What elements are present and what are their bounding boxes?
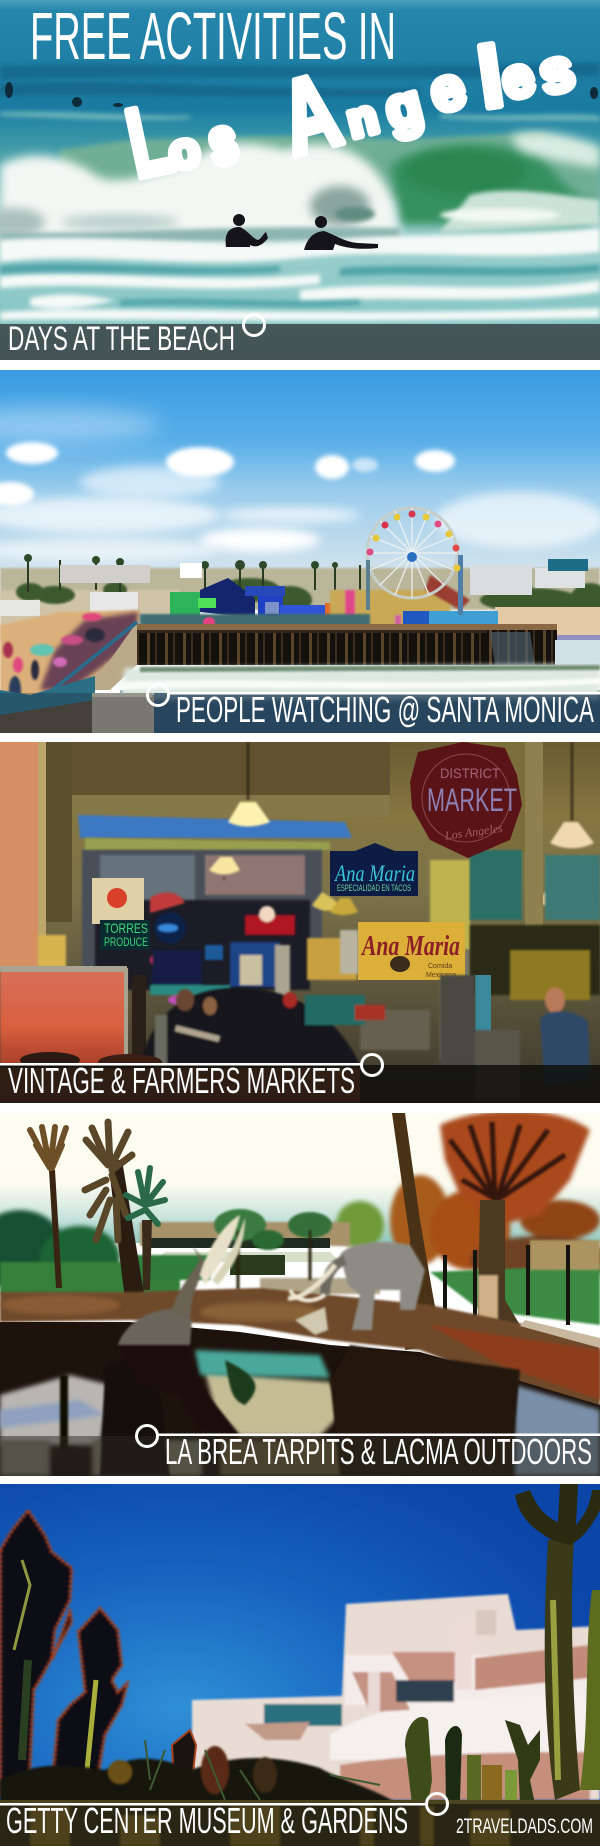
caption band: [0, 324, 600, 360]
caption band: [0, 1436, 600, 1476]
ground: [0, 1288, 600, 1410]
red board: [0, 968, 127, 1065]
right pillars: [430, 860, 470, 950]
panel: getty center: [0, 1484, 600, 1846]
caption: days at the beach: DAYS AT THE BEACH: [8, 320, 235, 358]
panel: vintage and farmers markets: [0, 742, 600, 1103]
roller coaster: [329, 574, 471, 624]
blue beam: [78, 815, 352, 838]
sign: torres produce: [92, 878, 150, 950]
sign: yellow ana maria: Mexicana: [426, 972, 456, 979]
title script: Los Angeles: e: [423, 53, 472, 126]
marker ring: [136, 1426, 158, 1446]
palm tops: [27, 560, 361, 592]
sign: yellow ana maria: Ana Maria: [360, 931, 460, 962]
pier and pilings: [137, 630, 557, 665]
bottom planting under band: [0, 1800, 600, 1846]
sign: district market: MARKET: [427, 782, 517, 818]
mammoth: standing: [288, 1242, 425, 1335]
title script: Los Angeles: A: [269, 51, 352, 178]
pond: [0, 1322, 600, 1476]
divider line: [0, 1803, 427, 1806]
marker ring: [244, 314, 264, 336]
title script: Los Angeles: s: [202, 105, 243, 178]
sign: ana maria neon: [330, 843, 418, 896]
title script: Los Angeles: o: [164, 120, 204, 181]
divider line: [168, 692, 600, 694]
panel: days at the beach: [0, 0, 600, 360]
right cactus: [515, 1484, 600, 1800]
photo: grand central market: [0, 742, 600, 1103]
caption: vintage and farmers markets: VINTAGE & FARMERS MARKETS: [8, 1060, 355, 1101]
panel: la brea tarpits: [0, 1111, 600, 1483]
caption band: [0, 1804, 600, 1846]
divider line: [158, 1434, 600, 1436]
photo: ocean wave: [0, 0, 600, 360]
amusement park: [200, 578, 255, 618]
sign: ana maria neon: Ana Maria: [333, 861, 415, 886]
tree line: [0, 1175, 600, 1290]
ferris wheel: [366, 508, 463, 615]
wave barrel: [390, 145, 600, 225]
walkway bridge: [95, 624, 137, 690]
marker ring: [426, 1794, 448, 1814]
title script: Los Angeles: s: [532, 35, 581, 108]
swimmers: [226, 214, 378, 250]
sign: torres produce: TORRES: [104, 920, 148, 936]
right palm: [392, 1111, 600, 1350]
photo: mammoths at tar pits: [0, 1111, 600, 1483]
title script: Los Angeles: l: [472, 29, 509, 127]
panel: people watching at santa monica: [0, 370, 600, 733]
left column: [0, 742, 38, 967]
sign: yellow ana maria: Comida: [428, 963, 452, 970]
surf: [120, 690, 600, 733]
low agave planting: [0, 1746, 400, 1808]
palm trees centre: [214, 1209, 332, 1290]
caption band: [154, 693, 600, 733]
neon cluster: [150, 906, 295, 1005]
sign: district market: DISTRICT: [440, 765, 500, 781]
railings and lower deck: [0, 676, 95, 715]
title script: Los Angeles: g: [378, 71, 429, 143]
marker ring: [362, 1054, 382, 1076]
caption band: [0, 1065, 600, 1103]
building: [192, 1594, 600, 1800]
buildings: [0, 559, 588, 616]
title script: Los Angeles: [117, 29, 581, 198]
left cacti: [0, 1510, 128, 1800]
tall palms left: [30, 1122, 165, 1300]
photo: getty center and cacti: [0, 1484, 600, 1846]
man in plaid: [540, 987, 590, 1085]
title script: Los Angeles: L: [117, 82, 181, 198]
sign: district market: [410, 742, 522, 858]
shore and hills: [0, 568, 600, 610]
marker ring: [148, 684, 168, 706]
crowd on the walkway: [0, 608, 140, 695]
foam: [0, 144, 400, 240]
surfers far: [5, 82, 598, 107]
title script: Los Angeles: e: [495, 43, 540, 112]
sand right: [495, 607, 600, 637]
pendant lamps: [209, 742, 594, 915]
crowd and counter: [142, 974, 520, 1065]
sign: yellow ana maria: [358, 922, 465, 980]
sign: ana maria neon: ESPECIALIDAD EN TACOS: [337, 883, 411, 893]
museum building: [140, 1222, 350, 1246]
photo: santa monica pier: [0, 370, 600, 733]
lawn: [0, 1262, 180, 1294]
mammoth: sunken: [118, 1215, 245, 1345]
clouds: [0, 407, 600, 562]
surf streaks: [0, 228, 600, 321]
sign: district market: Los Angeles: [443, 821, 504, 843]
foreground cacti: [172, 1717, 540, 1804]
divider line: [0, 1063, 362, 1066]
hall depth: [82, 850, 322, 980]
sign: torres produce: PRODUCE: [104, 935, 148, 949]
title script: Los Angeles: n: [342, 90, 383, 149]
